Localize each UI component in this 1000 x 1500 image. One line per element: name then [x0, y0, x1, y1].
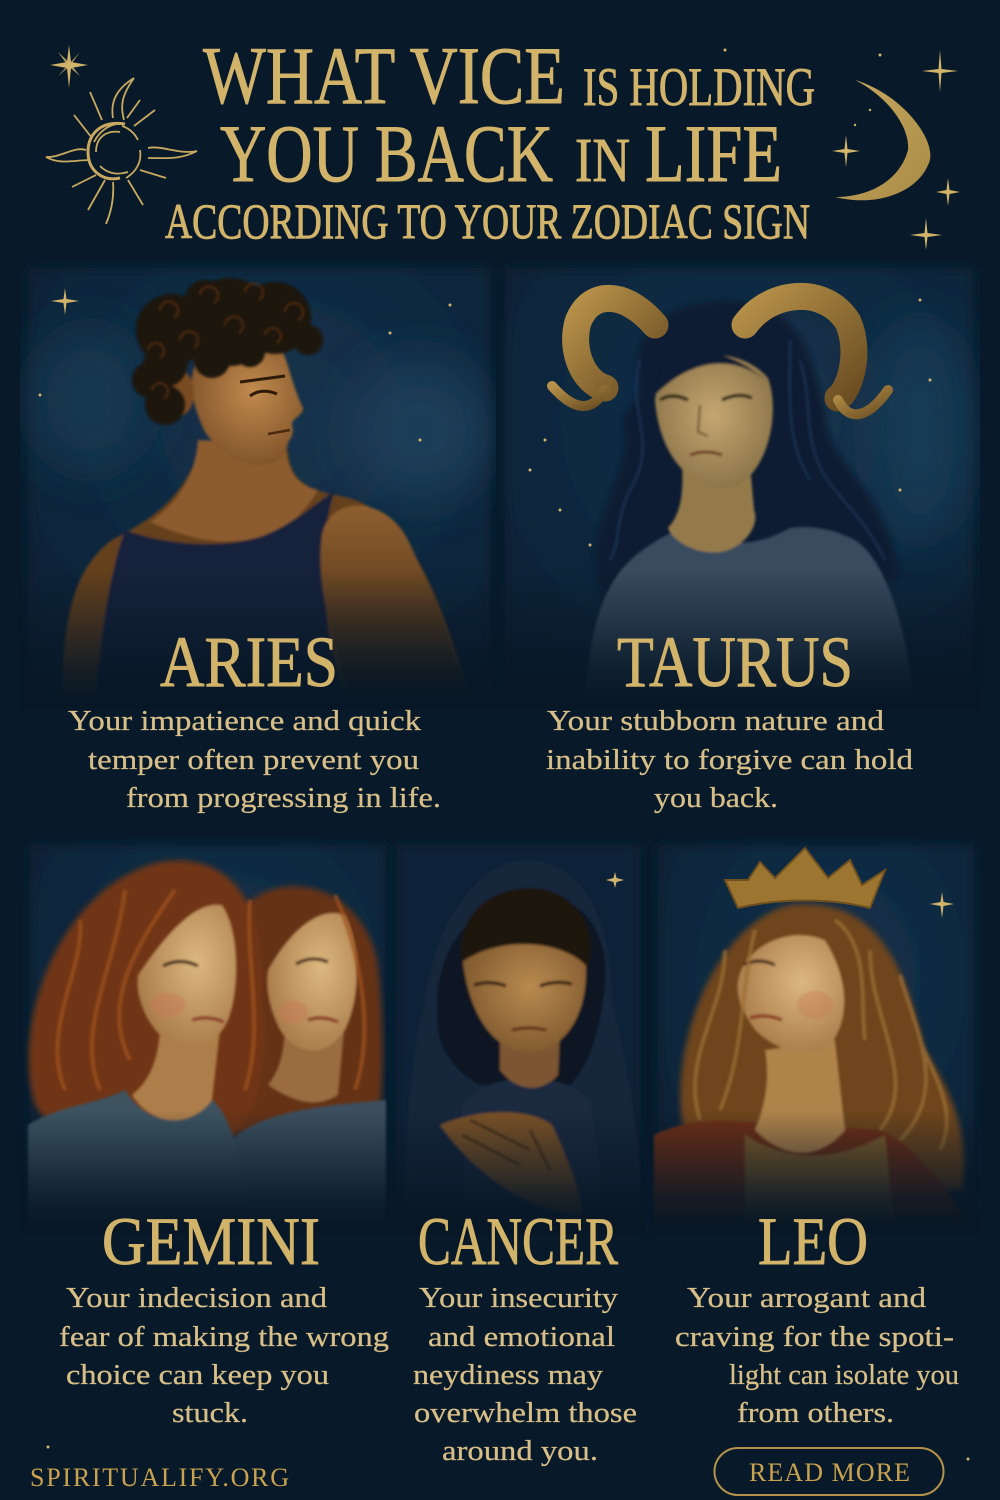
figure: Leo queen — [654, 848, 976, 1236]
text: Taurus description: inability to forgive can hold — [546, 744, 914, 776]
read more button — [714, 1448, 944, 1495]
text: Leo description: craving for the spoti- — [675, 1321, 954, 1353]
text: Cancer description: Your insecurity — [419, 1282, 619, 1314]
text: Taurus description: Your stubborn nature and — [547, 705, 885, 737]
text: Leo description — [675, 1282, 959, 1429]
heading: Cancer: CANCER — [418, 1203, 618, 1279]
text: Cancer description — [413, 1282, 637, 1467]
hair curls — [132, 278, 323, 425]
text: Aries description — [68, 705, 441, 814]
read more button: READ MORE — [749, 1458, 910, 1487]
panel: Leo — [650, 845, 980, 1236]
panel: Gemini — [25, 842, 388, 1198]
text: Aries description: temper often prevent you — [88, 744, 419, 776]
text: Gemini description: choice can keep you — [66, 1359, 329, 1391]
icon: sun — [46, 78, 197, 224]
text: Cancer description: overwhelm those — [414, 1397, 637, 1429]
text: Gemini description: Your indecision and — [66, 1282, 328, 1314]
figure: Cancer hooded youth — [408, 861, 634, 1213]
panel: Aries — [20, 268, 496, 710]
text: Leo description: from others. — [737, 1397, 894, 1429]
icon: moon — [835, 80, 930, 200]
text: Cancer description: neydiness may — [413, 1359, 604, 1391]
title: IN — [575, 127, 630, 195]
title — [165, 30, 815, 249]
icon: ram horns — [552, 296, 888, 414]
heading: Leo: LEO — [758, 1203, 868, 1279]
title: LIFE — [645, 108, 782, 199]
text: Aries description: Your impatience and quick — [68, 705, 422, 737]
figure: Gemini twins — [28, 860, 386, 1236]
text: Aries description: from progressing in life. — [126, 782, 441, 814]
title: ACCORDING TO YOUR ZODIAC SIGN — [165, 193, 810, 249]
title: YOU BACK — [220, 108, 553, 199]
title: WHAT VICE — [203, 30, 565, 121]
text: Taurus description — [546, 705, 914, 814]
text: Leo description: Your arrogant and — [687, 1282, 927, 1314]
panel: Cancer — [388, 845, 646, 1236]
figure: Taurus woman — [552, 296, 915, 705]
panel: Taurus — [505, 265, 980, 666]
heading: Aries: ARIES — [160, 622, 338, 702]
heading: Taurus: TAURUS — [617, 622, 853, 702]
text: Taurus description: you back. — [654, 782, 778, 814]
text: Cancer description: around you. — [442, 1435, 598, 1467]
text: Gemini description: fear of making the wrong — [59, 1321, 389, 1353]
text: Leo description: light can isolate you — [729, 1360, 959, 1391]
text: Cancer description: and emotional — [428, 1321, 615, 1353]
icon: crown — [725, 848, 885, 908]
heading: Gemini: GEMINI — [102, 1203, 320, 1279]
figure: Aries man — [62, 278, 470, 700]
text: Gemini description: stuck. — [172, 1397, 248, 1429]
text: Gemini description — [59, 1282, 389, 1429]
footer brand: SPIRITUALIFY.ORG — [30, 1463, 289, 1492]
title: IS HOLDING — [583, 57, 815, 117]
